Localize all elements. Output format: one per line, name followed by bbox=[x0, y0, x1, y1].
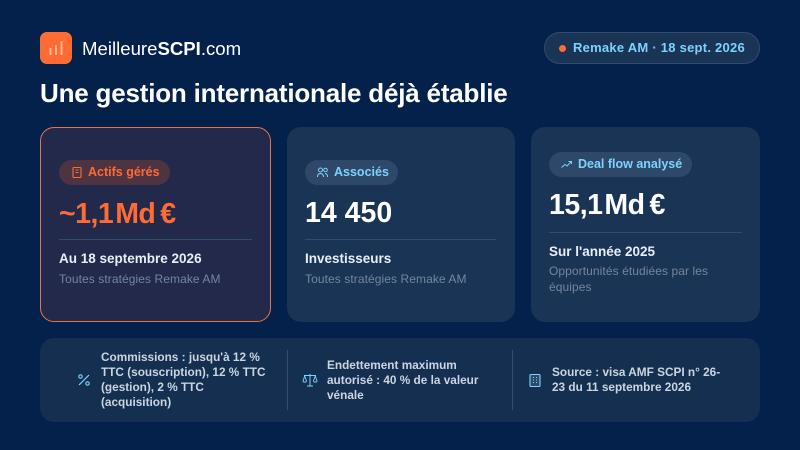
fact: endettement: Endettement maximum bbox=[327, 358, 457, 372]
divider bbox=[287, 350, 288, 410]
description bbox=[549, 264, 708, 294]
logo: orange tile with bars bbox=[40, 32, 72, 64]
fact: endettement bbox=[327, 358, 478, 402]
icon: scales bbox=[302, 374, 318, 386]
badge dot bbox=[559, 45, 566, 52]
divider bbox=[305, 239, 496, 240]
fact: commissions bbox=[101, 350, 266, 409]
panel: deal flow bbox=[531, 127, 760, 322]
badge text: Remake AM · 18 sept. 2026 bbox=[573, 40, 745, 55]
subtitle: Sur l'année 2025 bbox=[549, 244, 655, 259]
icon: building bbox=[72, 167, 82, 178]
value: 15,1 Md € bbox=[549, 189, 665, 221]
title: Une gestion internationale déjà établie bbox=[40, 78, 508, 108]
fact: commissions: Commissions : jusqu'à 12 % bbox=[101, 350, 260, 364]
description: Toutes stratégies Remake AM bbox=[305, 272, 467, 286]
fact: source: 23 du 11 septembre 2026 bbox=[552, 380, 691, 394]
pill: actifs gérés bbox=[59, 160, 170, 185]
fact: commissions: (acquisition) bbox=[101, 395, 171, 409]
pill: associés bbox=[305, 160, 398, 185]
subtitle: Investisseurs bbox=[305, 251, 391, 266]
panel: footer facts bbox=[40, 338, 760, 422]
description: équipes bbox=[549, 280, 592, 294]
pill label: Deal flow analysé bbox=[578, 157, 682, 171]
icon: document building bbox=[529, 374, 541, 387]
date badge bbox=[544, 32, 760, 64]
fact: source: Source : visa AMF SCPI n° 26- bbox=[552, 365, 720, 379]
brand name: MeilleureSCPI.com bbox=[82, 38, 241, 59]
value: ~1,1 Md € bbox=[59, 198, 176, 230]
panel: associés bbox=[287, 127, 515, 322]
fact: commissions: TTC (souscription), 12 % TTC bbox=[101, 365, 266, 379]
icon: trend bbox=[561, 161, 572, 168]
pill: deal flow bbox=[549, 152, 692, 177]
icon: people bbox=[317, 168, 328, 177]
value: 14 450 bbox=[305, 197, 392, 229]
fact: endettement: vénale bbox=[327, 388, 364, 402]
fact: endettement: autorisé : 40 % de la valeur bbox=[327, 373, 478, 387]
description: Opportunités étudiées par les bbox=[549, 264, 708, 278]
divider bbox=[512, 350, 513, 410]
fact: commissions: (gestion), 2 % TTC bbox=[101, 380, 204, 394]
pill label: Associés bbox=[334, 165, 389, 179]
divider bbox=[59, 239, 252, 240]
description: Toutes stratégies Remake AM bbox=[59, 272, 221, 286]
panel: actifs gérés bbox=[40, 127, 271, 322]
pill label: Actifs gérés bbox=[88, 165, 160, 179]
fact: source bbox=[552, 365, 720, 394]
divider bbox=[549, 232, 742, 233]
subtitle: Au 18 septembre 2026 bbox=[59, 251, 202, 266]
icon: percent bbox=[78, 374, 90, 386]
